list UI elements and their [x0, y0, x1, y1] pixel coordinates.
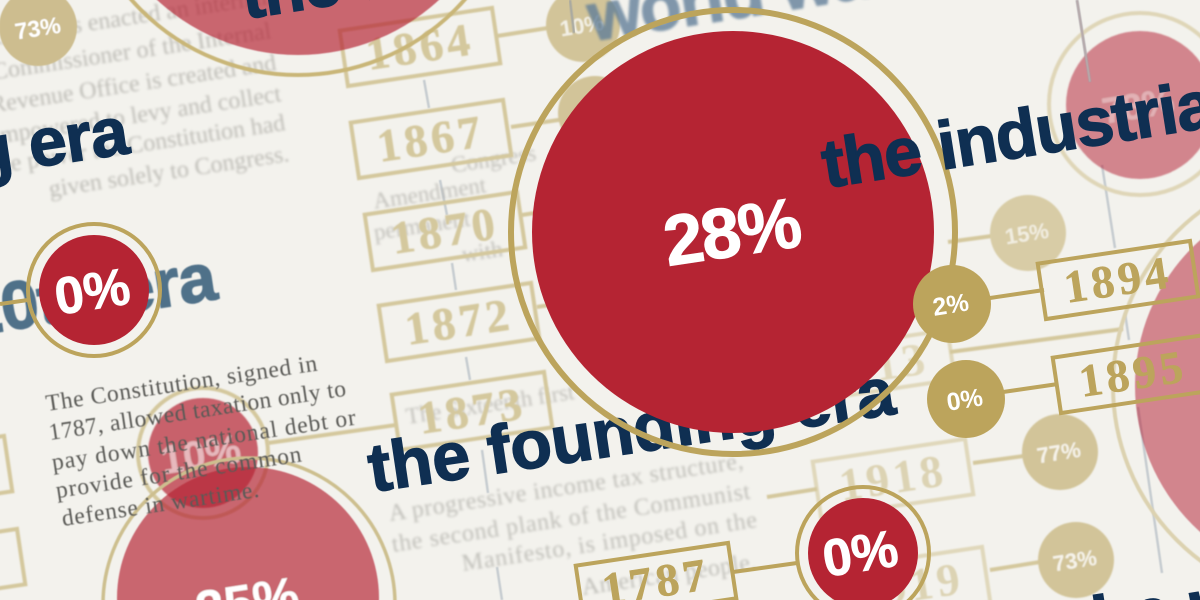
- faded text: progressive income tax: [387, 448, 759, 600]
- small pink bubble 10%: 10%: [158, 427, 244, 483]
- main bubble 28%: 28%: [658, 184, 806, 282]
- connector 1787: [733, 563, 797, 572]
- faded background text: amendment note: The Sixteenth first: [404, 379, 576, 429]
- faded background text: amendment note: permanent: [372, 206, 472, 245]
- year box 1873: [392, 372, 552, 450]
- year box 1913: [795, 329, 955, 402]
- spine over pink bubble: [1077, 0, 1090, 82]
- year box 1872: 1872: [402, 288, 516, 355]
- pink bubble right edge: [1113, 168, 1200, 600]
- year box 1870: [365, 192, 525, 270]
- faded background text: amendment note: Amendment: [372, 172, 488, 214]
- faded text: commissioner of internal revenue: given solely to Congress.: [47, 141, 291, 203]
- year box 1867: 1867: [374, 105, 488, 172]
- year box 1895: [1053, 335, 1200, 413]
- faded percent circle 10%: 10%: [558, 10, 606, 41]
- year box 1867: [351, 100, 511, 178]
- year box 1864: 1864: [363, 13, 477, 80]
- faded background text: amendment note: Congress: [449, 140, 538, 178]
- faded percent circle 73% lower: [1038, 522, 1114, 598]
- year box 1894: [1038, 241, 1198, 319]
- main bubble 28%: [511, 10, 955, 454]
- heading: the founding era: the founding era: [363, 353, 901, 507]
- year box 1918: 1918: [836, 444, 950, 511]
- year box 1919: [830, 547, 990, 600]
- faded text: progressive income tax: A progressive income tax structure,: [387, 448, 745, 527]
- partial box left lower: [0, 529, 25, 600]
- faded percent circle 77%: [1022, 414, 1098, 490]
- connector 1894: [990, 290, 1044, 298]
- year box 1913: 1913: [818, 332, 932, 399]
- pink bubble 25%: [103, 458, 395, 600]
- percent circle 2%: 2%: [931, 288, 971, 322]
- percent circle 2%: [913, 265, 991, 343]
- body text: constitution: 1787, allowed taxation only to: [47, 376, 348, 446]
- body text: constitution: provide for the common: [54, 442, 303, 504]
- year box 1872: [379, 283, 539, 361]
- percent circle 73% upper left: 73%: [13, 12, 63, 45]
- year box 1787: [576, 543, 736, 600]
- era marker 0% left: 0%: [51, 258, 134, 327]
- faded percent circle behind main: [558, 76, 632, 150]
- body text: constitution: [44, 351, 358, 532]
- pink bubble 78%: [1049, 13, 1200, 195]
- faded background text: amendment note: [372, 140, 576, 429]
- connector 1895: [1003, 384, 1058, 392]
- percent circle 0%: [927, 360, 1005, 438]
- faded percent circle 73% lower: 73%: [1051, 545, 1099, 576]
- small pink bubble 10%: [138, 388, 268, 518]
- faded percent circle 15%: [990, 195, 1066, 271]
- pink bubble top: [76, 0, 520, 75]
- percent circle 0%: 0%: [945, 383, 985, 417]
- faded percent circle 77%: 77%: [1035, 437, 1083, 468]
- body text: constitution: pay down the national debt or: [50, 405, 358, 476]
- year box 1918: [813, 439, 973, 517]
- spine over circle: [570, 0, 574, 33]
- era marker 0% left: [0, 224, 160, 356]
- faded percent circle 10%: [546, 0, 620, 62]
- year box 1870: 1870: [388, 197, 502, 264]
- faded text: progressive income tax: the second plank of the Communist: [390, 479, 752, 558]
- faded text: progressive income tax: American people.: [580, 549, 758, 600]
- percent circle 73% upper left: [0, 0, 77, 66]
- body text: constitution: The Constitution, signed in: [44, 351, 319, 417]
- faded percent circle 15%: 15%: [1003, 218, 1051, 249]
- faded text: commissioner of internal revenue: [0, 0, 291, 203]
- year box 1895: 1895: [1076, 340, 1190, 407]
- timeline spines: [424, 0, 1162, 600]
- era marker 0% lower: 0%: [819, 520, 902, 589]
- faded background text: amendment note: with: [460, 236, 505, 267]
- year box 1894: 1894: [1061, 246, 1175, 313]
- body text: constitution: defense in wartime.: [60, 477, 261, 532]
- faded text: progressive income tax: Manifesto, is imposed on the: [460, 507, 759, 577]
- partial box left upper: [0, 436, 12, 514]
- era marker 0% lower: [797, 487, 929, 600]
- pink bubble 78%: 78%: [1099, 80, 1177, 132]
- year box 1864: [340, 8, 500, 86]
- faded connectors: [268, 28, 1123, 570]
- year box 1873: 1873: [415, 377, 529, 444]
